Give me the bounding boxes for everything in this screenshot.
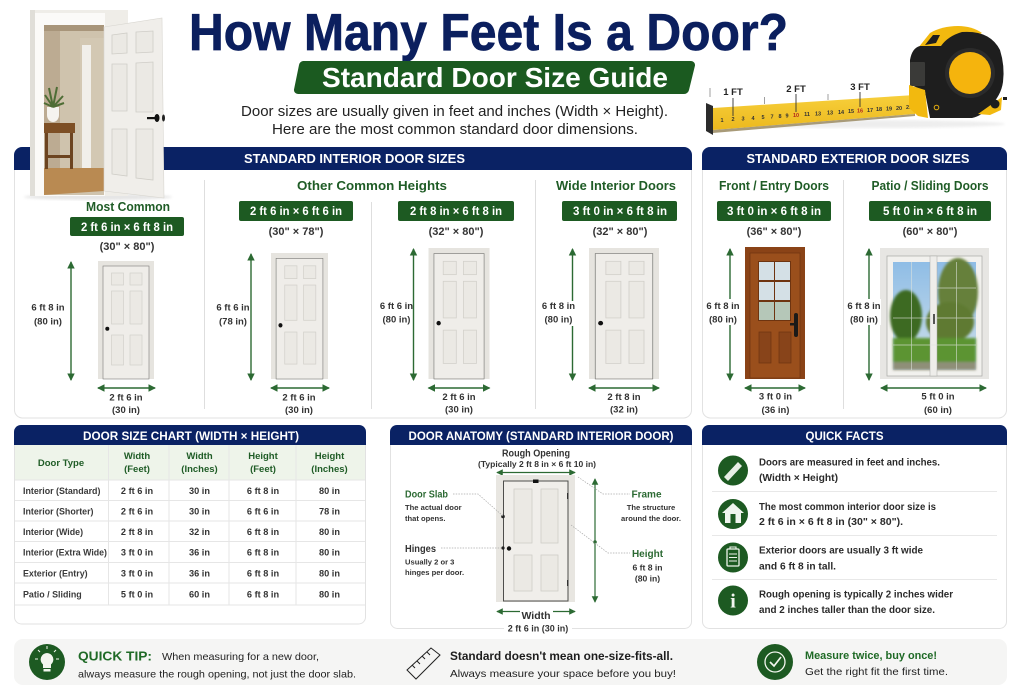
table row: interior shorter: 2 ft 6 in [121, 506, 153, 516]
table row: interior shorter: 30 in [189, 506, 210, 516]
table row: interior standard: 80 in [319, 486, 340, 496]
column: 2 ft 6 in by 6 ft 6 in door: (30 in) [285, 405, 313, 416]
table row: patio sliding: 6 ft 8 in [247, 590, 279, 600]
tape numbers: 14 [838, 110, 845, 116]
header: door size chart: DOOR SIZE CHART (WIDTH × HEIGHT) [83, 429, 299, 443]
table row: interior standard [23, 486, 340, 496]
column: 2 ft 6 in by 6 ft 6 in door: 2 ft 6 in [282, 392, 316, 404]
table header row: Width [186, 451, 213, 462]
table header row: (Feet) [250, 464, 276, 475]
column: wide interior doors: (32 in) [610, 404, 638, 416]
label: frame: Frame [631, 490, 662, 500]
column: most common door: (80 in) [34, 316, 62, 328]
fact: rough opening [718, 586, 953, 616]
fact: measured in feet and inches [718, 456, 940, 486]
table row: interior shorter [23, 506, 340, 516]
table row: interior standard: 6 ft 8 in [247, 486, 279, 496]
icon: information [718, 586, 748, 616]
table row: interior shorter: 78 in [319, 506, 340, 516]
column: 2 ft 8 in by 6 ft 8 in door: (30 in) [445, 404, 473, 416]
table row: interior shorter: Interior (Shorter) [23, 506, 94, 516]
fact: measured in feet and inches: Doors are measured in feet and inches. [759, 458, 940, 468]
column: front entry door: (80 in) [709, 314, 737, 326]
subtitle banner: Standard Door Size Guide [322, 62, 668, 93]
table row: interior wide: Interior (Wide) [23, 527, 83, 537]
intro text: Door sizes are usually given in feet and inches (Width × Height). [241, 104, 668, 120]
tape numbers: 21 [906, 105, 912, 111]
column: patio sliding door: (80 in) [850, 314, 878, 326]
fact: measured in feet and inches: (Width × Height) [759, 473, 838, 484]
column: patio sliding door: (60" × 80") [903, 226, 958, 238]
label: frame: around the door. [621, 514, 681, 523]
fact: exterior doors [718, 542, 923, 572]
fact: most common interior size: The most common interior door size is [759, 502, 936, 513]
label: hinges: Hinges [405, 544, 436, 555]
table row: exterior entry [23, 568, 340, 578]
panel: door size chart [14, 425, 366, 624]
column: most common door: (30" × 80") [100, 241, 155, 253]
column: 2 ft 8 in by 6 ft 8 in door [380, 201, 514, 416]
tape numbers: 8 [778, 114, 782, 120]
header: door size chart [14, 425, 366, 445]
column: patio sliding door [847, 178, 991, 416]
label: hinges: Usually 2 or 3 [405, 558, 454, 566]
illustration: sliding patio door [880, 248, 989, 379]
diagram: door with frame [496, 475, 575, 602]
table row: interior extra wide [23, 548, 340, 558]
column: wide interior doors: 2 ft 8 in [607, 392, 641, 403]
icon: check badge [757, 644, 793, 680]
column: 2 ft 6 in by 6 ft 6 in door: (78 in) [219, 316, 247, 328]
label: rough opening: Rough Opening [502, 448, 570, 460]
header: standard exterior door sizes [702, 147, 1007, 170]
column: most common door: 6 ft 8 in [31, 302, 65, 314]
column: 2 ft 8 in by 6 ft 8 in door: (32" × 80") [429, 226, 484, 238]
column: most common door: 2 ft 6 in [109, 392, 143, 404]
tip: quick tip: always measure the rough opening, not just the door slab. [78, 668, 356, 680]
column: 2 ft 6 in by 6 ft 6 in door [216, 201, 353, 416]
fact: exterior doors: and 6 ft 8 in tall. [759, 562, 836, 572]
column: patio sliding door: (60 in) [924, 405, 952, 416]
intro text [241, 104, 668, 138]
icon: clipboard [718, 542, 748, 572]
table row: patio sliding: Patio / Sliding [23, 590, 82, 600]
label: width: Width [521, 610, 551, 622]
label: hinges: hinges per door. [405, 568, 464, 577]
panel: standard interior door sizes [14, 147, 692, 418]
tape numbers: 5 [761, 115, 765, 121]
column: patio sliding door: 5 ft 0 in × 6 ft 8 in [883, 206, 977, 218]
icon: house [718, 499, 748, 529]
fact: rough opening: and 2 inches taller than the door size. [759, 605, 935, 616]
column: front entry door: 3 ft 0 in × 6 ft 8 in [727, 206, 821, 218]
column: front entry door: 6 ft 8 in [706, 301, 740, 312]
illustration: open door in frame [24, 10, 172, 200]
label: height: 6 ft 8 in [632, 562, 663, 572]
label: door slab: that opens. [405, 514, 446, 523]
tape numbers: 13 [815, 112, 821, 118]
label: door slab [405, 490, 462, 523]
header: standard interior door sizes [14, 147, 692, 170]
tape numbers: 4 [751, 116, 755, 122]
table row: interior standard: 30 in [189, 486, 210, 496]
table header row: Height [248, 451, 279, 462]
tape numbers: 17 [867, 108, 873, 114]
tape numbers: 11 [804, 112, 810, 118]
intro text: Here are the most common standard door dimensions. [272, 122, 638, 138]
column: most common door [31, 199, 184, 416]
tape numbers: 13 [827, 110, 833, 116]
tip: standard does not mean one size [407, 648, 676, 680]
fact: exterior doors: Exterior doors are usually 3 ft wide [759, 546, 923, 556]
tip: measure twice: Get the right fit the first time. [805, 666, 948, 678]
label: frame [621, 490, 681, 523]
column: front entry door: (36" × 80") [747, 226, 802, 238]
label: frame: The structure [627, 503, 675, 512]
tape numbers: 10 [793, 113, 799, 119]
table row: patio sliding [23, 590, 340, 600]
header: door anatomy [390, 425, 692, 445]
tape foot labels [723, 82, 870, 98]
column: front entry door: Front / Entry Doors [719, 178, 829, 193]
table row: patio sliding: 5 ft 0 in [121, 590, 153, 600]
title: How Many Feet Is a Door? [189, 4, 788, 62]
column: front entry door: 3 ft 0 in [759, 392, 792, 402]
tape foot labels: 1 FT [723, 87, 743, 98]
header: standard interior door sizes: STANDARD INTERIOR DOOR SIZES [244, 151, 465, 166]
tape numbers [720, 105, 912, 124]
tape numbers: 16 [857, 108, 863, 114]
heading: other common heights: Other Common Heights [297, 178, 447, 193]
tape numbers: 19 [886, 106, 892, 112]
table row: interior standard: 2 ft 6 in [121, 486, 153, 496]
label: hinges [405, 544, 464, 577]
panel: quick facts [702, 425, 1007, 628]
tape numbers: 15 [848, 109, 854, 115]
icon: ruler [718, 456, 748, 486]
tape numbers: 20 [896, 106, 902, 112]
header: standard exterior door sizes: STANDARD EXTERIOR DOOR SIZES [746, 151, 970, 166]
table row: interior shorter: 6 ft 6 in [247, 506, 279, 516]
header: door anatomy: DOOR ANATOMY (STANDARD INTERIOR DOOR) [408, 429, 674, 443]
tip: quick tip: QUICK TIP: [78, 648, 152, 664]
tape numbers: 3 [741, 116, 745, 122]
table row: exterior entry: Exterior (Entry) [23, 568, 88, 578]
tip: standard does not mean one size: Standard doesn't mean one-size-fits-all. [450, 651, 673, 663]
table row: exterior entry: 3 ft 0 in [121, 568, 153, 578]
column: wide interior doors: 6 ft 8 in [542, 301, 575, 312]
tape numbers: 2 [731, 117, 735, 123]
column: 2 ft 8 in by 6 ft 8 in door: 2 ft 6 in [442, 392, 476, 403]
column: most common door: 2 ft 6 in × 6 ft 8 in [81, 222, 173, 234]
table row: interior wide: 6 ft 8 in [247, 527, 279, 537]
table row: interior extra wide: 3 ft 0 in [121, 548, 153, 558]
label: rough opening: (Typically 2 ft 8 in × 6 ft 10 in) [478, 459, 596, 469]
table row: interior wide: 2 ft 8 in [121, 527, 153, 537]
illustration: tape measure [706, 26, 1007, 135]
label: door slab: Door Slab [405, 490, 448, 500]
icon: light bulb [29, 644, 65, 680]
column: wide interior doors [542, 178, 677, 416]
column: wide interior doors: (80 in) [545, 314, 572, 326]
table header row: Height [315, 451, 345, 462]
label: height [632, 549, 664, 584]
tape numbers: 1 [720, 118, 724, 124]
table header row: Width [124, 451, 150, 462]
table row: interior standard: Interior (Standard) [23, 486, 100, 496]
tape case [909, 26, 1007, 118]
fact: most common interior size [718, 499, 936, 529]
table row: interior extra wide: 6 ft 8 in [247, 548, 279, 558]
panel: standard exterior door sizes [702, 147, 1007, 418]
table row: interior extra wide: 80 in [319, 548, 340, 558]
label: rough opening [478, 448, 596, 472]
tip: quick tip: When measuring for a new door, [162, 651, 319, 663]
tape foot labels: 2 FT [786, 84, 806, 95]
tip: quick tip [29, 644, 356, 680]
column: most common door: Most Common [86, 199, 170, 214]
column: 2 ft 6 in by 6 ft 6 in door: 2 ft 6 in × 6 ft 6 in [250, 206, 342, 218]
icon: ruler outline [407, 648, 440, 679]
column: patio sliding door: 5 ft 0 in [921, 392, 955, 402]
column: 2 ft 8 in by 6 ft 8 in door: 2 ft 8 in × 6 ft 8 in [410, 206, 502, 218]
tip: standard does not mean one size: Always measure your space before you buy! [450, 668, 676, 680]
column: patio sliding door: Patio / Sliding Doors [872, 178, 988, 193]
fact: most common interior size: 2 ft 6 in × 6 ft 8 in (30" × 80"). [759, 517, 903, 528]
column: wide interior doors: (32" × 80") [593, 226, 648, 238]
table row: exterior entry: 36 in [189, 568, 210, 578]
label: width [497, 610, 575, 634]
table row: interior wide: 80 in [319, 527, 340, 537]
tape numbers: 9 [785, 114, 789, 120]
tape numbers: 7 [770, 114, 774, 120]
column: 2 ft 6 in by 6 ft 6 in door: 6 ft 6 in [216, 302, 250, 314]
table header row: (Feet) [124, 464, 150, 475]
column: front entry door [706, 178, 831, 416]
column: patio sliding door: 6 ft 8 in [847, 301, 881, 312]
header: quick facts [702, 425, 1007, 445]
column: front entry door: (36 in) [762, 405, 789, 416]
label: height: (80 in) [635, 574, 660, 584]
tip: measure twice [757, 644, 948, 680]
table header row: Door Type [38, 458, 84, 469]
label: height: Height [632, 549, 664, 560]
table row: interior wide [23, 527, 340, 537]
table row: patio sliding: 60 in [189, 590, 210, 600]
panel: door anatomy [390, 425, 692, 634]
table header row [15, 445, 365, 480]
bottom tip band [14, 639, 1007, 685]
label: door slab: The actual door [405, 503, 462, 512]
tape numbers: 18 [876, 107, 882, 113]
column: wide interior doors: Wide Interior Doors [556, 178, 676, 193]
column: wide interior doors: 3 ft 0 in × 6 ft 8 in [573, 206, 667, 218]
header: quick facts: QUICK FACTS [806, 429, 884, 443]
table header row: (Inches) [181, 464, 218, 475]
column: 2 ft 6 in by 6 ft 6 in door: (30" × 78") [269, 226, 324, 238]
column: most common door: (30 in) [112, 405, 140, 416]
tape foot labels: 3 FT [850, 82, 870, 93]
table row: interior wide: 32 in [189, 527, 210, 537]
table row: exterior entry: 6 ft 8 in [247, 568, 279, 578]
table row: exterior entry: 80 in [319, 568, 340, 578]
column: 2 ft 8 in by 6 ft 8 in door: (80 in) [383, 314, 410, 326]
illustration: wooden entry door [745, 247, 805, 379]
icon: information: i [730, 590, 736, 612]
fact: rough opening: Rough opening is typically 2 inches wider [759, 590, 953, 600]
table header row: (Inches) [311, 464, 348, 475]
tip: measure twice: Measure twice, buy once! [805, 650, 937, 662]
table row: patio sliding: 80 in [319, 590, 340, 600]
column: 2 ft 8 in by 6 ft 8 in door: 6 ft 6 in [380, 301, 413, 312]
label: width: 2 ft 6 in (30 in) [508, 624, 568, 634]
table row: interior extra wide: Interior (Extra Wide) [23, 548, 107, 558]
table row: interior extra wide: 36 in [189, 548, 210, 558]
